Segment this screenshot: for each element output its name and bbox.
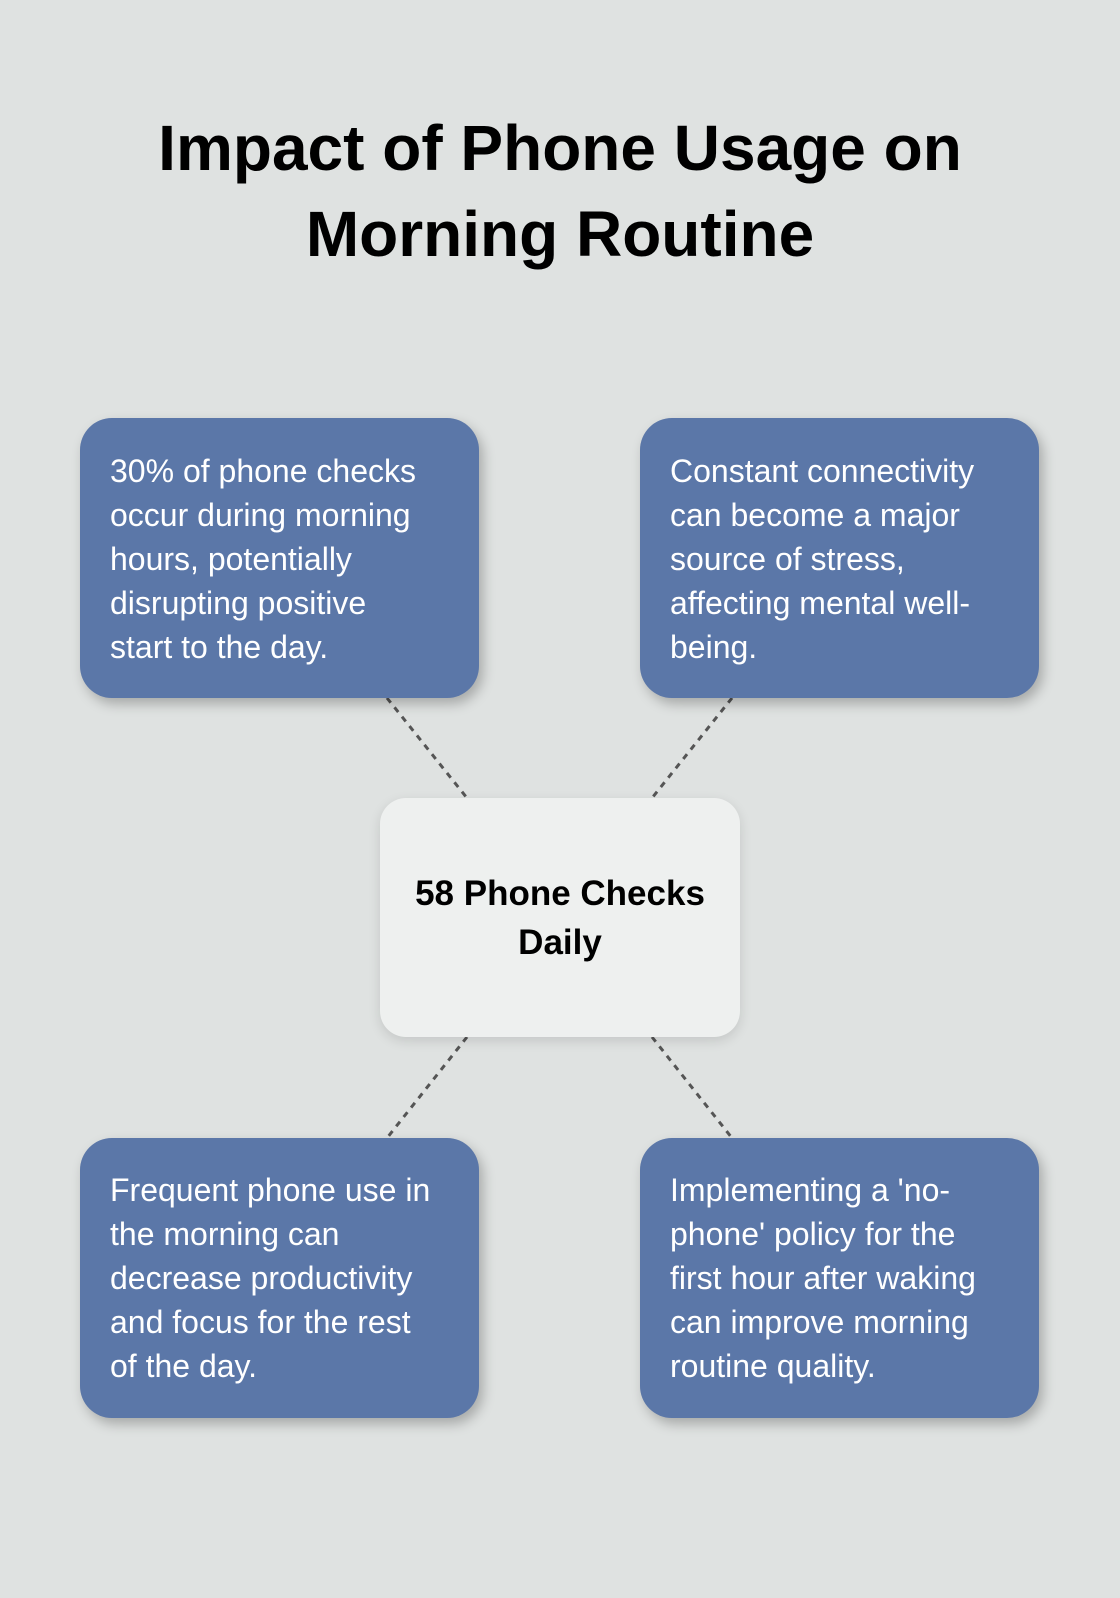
panel: bottom-right: phone' policy for the — [670, 1216, 955, 1252]
panel: top-right: affecting mental well- — [670, 585, 970, 621]
panel: bottom-left: the morning can — [110, 1216, 339, 1252]
center box: 58 Phone Checks — [415, 874, 705, 912]
panel: bottom-left: decrease productivity — [110, 1260, 412, 1296]
panel: top-left: occur during morning — [110, 497, 411, 533]
panel: top-right: being. — [670, 629, 757, 665]
panel: top-left: hours, potentially — [110, 541, 352, 577]
panel: bottom-left — [80, 1138, 479, 1418]
panel: top-left: 30% of phone checks — [110, 453, 416, 489]
panel: top-left: disrupting positive — [110, 585, 366, 621]
panel: top-left — [80, 418, 479, 698]
title — [158, 112, 962, 270]
panel: bottom-right — [640, 1138, 1039, 1418]
panel: bottom-right: can improve morning — [670, 1304, 969, 1340]
panel: top-right — [640, 418, 1039, 698]
panel: top-right: Constant connectivity — [670, 453, 974, 489]
panel: bottom-left: of the day. — [110, 1348, 257, 1384]
panel: bottom-left: and focus for the rest — [110, 1304, 411, 1340]
center box — [380, 798, 740, 1037]
panel: bottom-right: first hour after waking — [670, 1260, 976, 1296]
panel: top-left: start to the day. — [110, 629, 328, 665]
panel: top-right: can become a major — [670, 497, 960, 533]
panel: bottom-left: Frequent phone use in — [110, 1172, 430, 1208]
panel: bottom-right: routine quality. — [670, 1348, 876, 1384]
title: Morning Routine — [306, 198, 814, 270]
panel: bottom-right: Implementing a 'no- — [670, 1172, 950, 1208]
title: Impact of Phone Usage on — [158, 112, 962, 184]
panel: top-right: source of stress, — [670, 541, 905, 577]
center box: Daily — [518, 922, 602, 962]
